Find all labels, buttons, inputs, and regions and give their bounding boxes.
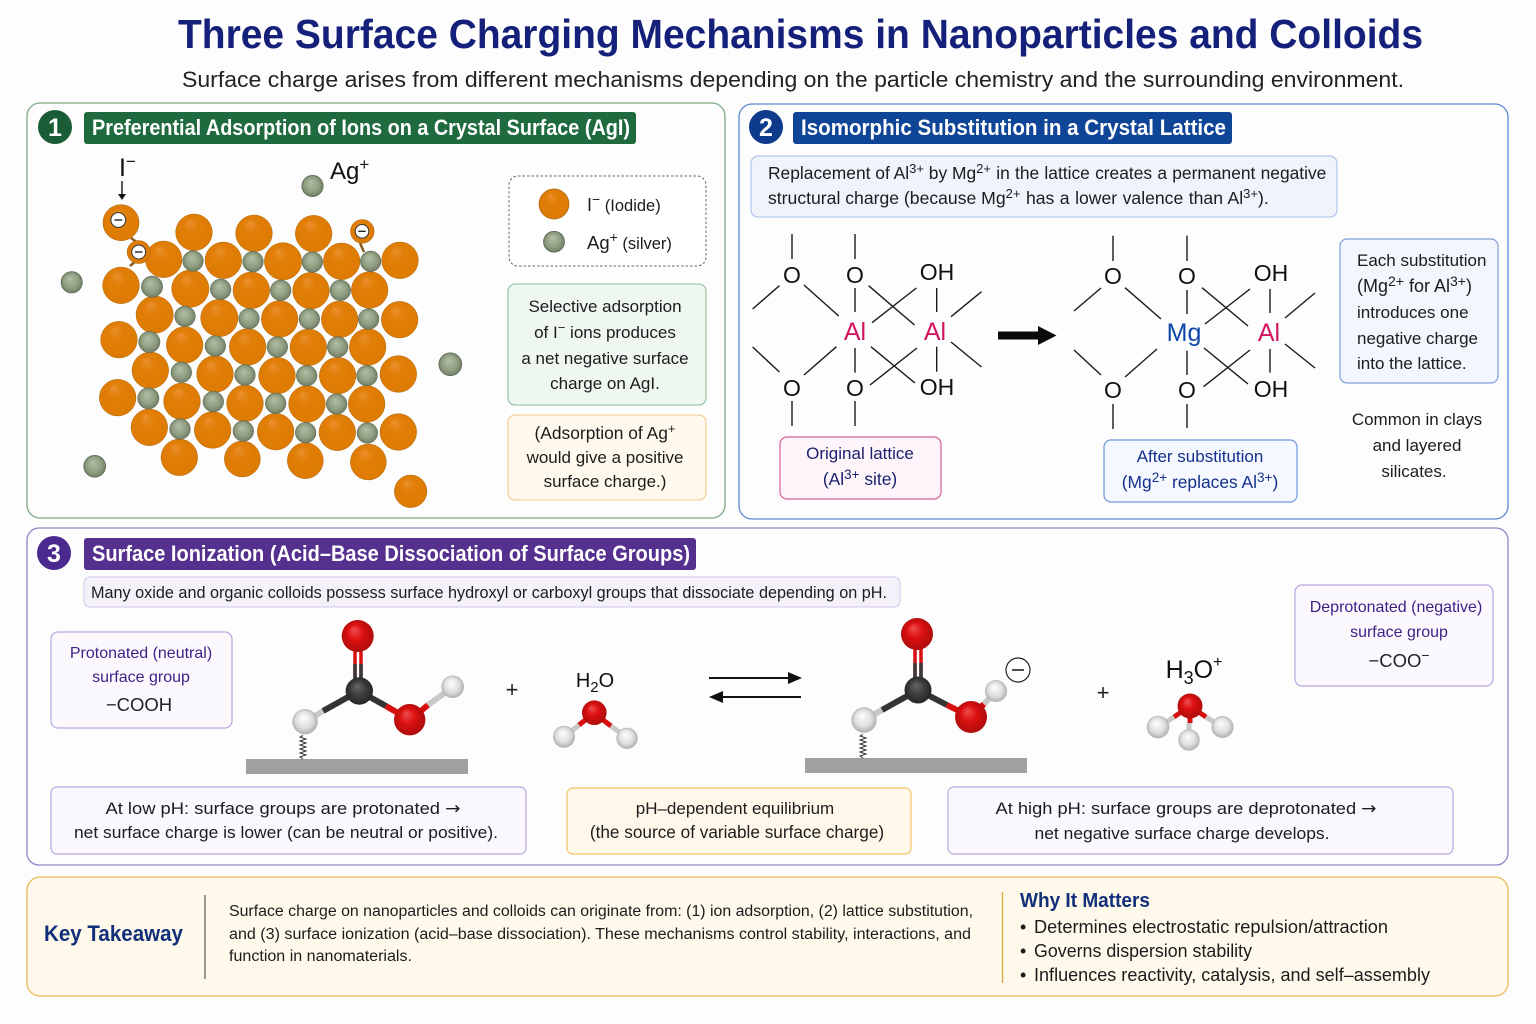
heading 1: Preferential Adsorption of Ions on a Crystal Surface (AgI) xyxy=(92,115,630,140)
callout: selective adsorption: − xyxy=(558,320,565,335)
callout: selective adsorption: of I xyxy=(534,323,558,342)
callout: replacement description: 3+ xyxy=(1243,186,1258,201)
original lattice structure: O xyxy=(783,262,801,288)
callout: replacement description: has a lower valence than Al xyxy=(1020,188,1243,208)
callout: replacement description: 2+ xyxy=(1006,186,1020,201)
free Ag+ ions xyxy=(61,175,462,477)
legend xyxy=(509,176,706,266)
note: clays: and layered xyxy=(1373,436,1461,455)
plus sign: + xyxy=(1097,680,1109,705)
subtitle: Surface charge arises from different mechanisms depending on the particle chemistry and the surrounding environment. xyxy=(182,67,1404,92)
substituted lattice structure: O xyxy=(1104,377,1122,403)
legend: iodide: − xyxy=(592,191,600,207)
callout: pH-dependent equilibrium: pH–dependent equilibrium xyxy=(636,799,834,818)
callout: selective adsorption: ions produces xyxy=(565,323,676,342)
label: deprotonated group: Deprotonated (negative) xyxy=(1310,599,1482,616)
number badge 2 xyxy=(749,110,783,144)
why it matters: Determines electrostatic repulsion/attraction xyxy=(1034,917,1388,937)
label: protonated group xyxy=(51,632,232,728)
water molecule: H xyxy=(576,670,590,692)
label: after substitution xyxy=(1104,440,1297,502)
substituted lattice structure xyxy=(1074,236,1315,429)
callout: low pH xyxy=(51,787,526,854)
legend: silver: + xyxy=(610,229,618,245)
panel 1: preferential adsorption xyxy=(27,103,725,518)
label: after substitution: After substitution xyxy=(1137,447,1263,466)
number badge 1: 1 xyxy=(48,114,62,142)
callout: replacement description xyxy=(751,156,1337,217)
negative charge symbol xyxy=(1006,658,1030,682)
callout: replacement description: by Mg xyxy=(924,163,976,183)
hydronium ion: 3 xyxy=(1184,668,1194,688)
why it matters: Governs dispersion stability xyxy=(1034,941,1252,961)
callout: high pH xyxy=(948,787,1453,854)
hydronium ion: O xyxy=(1194,656,1213,684)
original lattice structure xyxy=(753,234,982,426)
hydronium ion: H xyxy=(1166,656,1184,684)
panel 2: isomorphic substitution xyxy=(739,104,1508,519)
water molecule xyxy=(553,670,638,749)
callout: each substitution: (Mg xyxy=(1357,276,1388,296)
legend: iodide: I xyxy=(587,195,592,215)
callout: each substitution: 2+ xyxy=(1388,273,1404,289)
why it matters: • xyxy=(1020,965,1026,985)
original lattice structure: OH xyxy=(920,374,954,400)
AgI crystal lattice xyxy=(99,214,427,508)
number badge 3: 3 xyxy=(47,540,61,568)
original lattice structure: O xyxy=(846,262,864,288)
label: deprotonated group: −COO xyxy=(1368,650,1421,671)
callout: replacement description: 2+ xyxy=(976,161,991,176)
note: clays: silicates. xyxy=(1381,462,1447,481)
label: I- with arrow: − xyxy=(126,152,136,171)
label: I- with arrow xyxy=(118,152,136,200)
hydronium ion: + xyxy=(1213,654,1222,671)
takeaway heading: Key Takeaway xyxy=(44,921,184,946)
callout: Ag+ adsorption note: + xyxy=(668,421,676,436)
number badge 3 xyxy=(37,536,71,570)
protonated molecule on surface xyxy=(246,620,468,774)
callout: pH-dependent equilibrium xyxy=(567,788,911,854)
label: protonated group: −COOH xyxy=(106,694,172,715)
callout: replacement description: 3+ xyxy=(909,161,924,176)
callout: low pH: net surface charge is lower (can be neutral or positive). xyxy=(74,823,498,842)
why it matters: Influences reactivity, catalysis, and self–assembly xyxy=(1034,965,1430,985)
legend: silver xyxy=(544,229,672,253)
label: deprotonated group: − xyxy=(1421,647,1430,663)
number badge 1 xyxy=(38,110,72,144)
label: original lattice: (Al xyxy=(823,469,844,489)
takeaway text: Surface charge on nanoparticles and colloids can originate from: (1) ion adsorption, (2) lattice substitution, xyxy=(229,903,973,920)
panel 3 frame xyxy=(27,528,1508,865)
label: protonated group: Protonated (neutral) xyxy=(70,645,212,662)
callout: each substitution: into the lattice. xyxy=(1357,354,1467,373)
label: original lattice xyxy=(780,437,941,499)
legend: iodide: (Iodide) xyxy=(600,197,661,215)
takeaway frame xyxy=(27,877,1508,996)
number badge 2: 2 xyxy=(759,114,773,142)
callout: Ag+ adsorption note xyxy=(508,415,706,500)
arrow: substitution xyxy=(998,326,1056,345)
callout: selective adsorption: Selective adsorption xyxy=(528,297,682,316)
label: after substitution: 2+ xyxy=(1152,470,1167,485)
original lattice structure: Al xyxy=(924,318,946,346)
panel: key takeaway xyxy=(27,877,1508,996)
heading 2: Isomorphic Substitution in a Crystal Lattice xyxy=(801,115,1226,140)
panel 1 frame xyxy=(27,103,725,518)
label: original lattice: 3+ xyxy=(844,467,860,482)
original lattice structure: OH xyxy=(920,259,954,285)
label: Ag+: Ag xyxy=(330,158,359,185)
original lattice structure: Al xyxy=(844,318,866,346)
callout: each substitution: Each substitution xyxy=(1357,251,1486,270)
legend: silver: Ag xyxy=(587,232,610,253)
label: after substitution: ) xyxy=(1272,472,1278,492)
legend: iodide xyxy=(539,189,661,219)
panel 3: surface ionization xyxy=(27,528,1508,865)
why it matters: Why It Matters xyxy=(1020,890,1150,912)
callout: replacement description: in the lattice creates a permanent negative xyxy=(991,163,1326,183)
legend: silver: (silver) xyxy=(618,235,672,253)
callout: Ag+ adsorption note: would give a positive xyxy=(526,448,683,467)
substituted lattice structure: O xyxy=(1104,263,1122,289)
original lattice structure: O xyxy=(783,375,801,401)
callout: replacement description: Replacement of Al xyxy=(768,163,909,183)
note: clays xyxy=(1352,410,1482,481)
label: after substitution: 3+ xyxy=(1257,470,1273,485)
substituted lattice structure: O xyxy=(1178,377,1196,403)
water molecule: 2 xyxy=(590,679,599,696)
why it matters: • xyxy=(1020,917,1026,937)
callout: replacement description: ). xyxy=(1258,188,1269,208)
adsorbed iodide ions with negative charges xyxy=(103,205,374,266)
equilibrium arrows xyxy=(709,672,802,703)
note: clays: Common in clays xyxy=(1352,410,1482,429)
callout: replacement description: structural charge (because Mg xyxy=(768,188,1006,208)
label: Ag+: + xyxy=(359,155,369,174)
callout: low pH: At low pH: surface groups are protonated → xyxy=(106,799,460,819)
plus sign: + xyxy=(506,677,518,702)
title: Three Surface Charging Mechanisms in Nanoparticles and Colloids xyxy=(178,11,1423,57)
callout: each substitution: introduces one xyxy=(1357,303,1469,322)
callout: each substitution: 3+ xyxy=(1450,273,1466,289)
original lattice structure: O xyxy=(846,375,864,401)
substituted lattice structure: OH xyxy=(1254,260,1288,286)
water molecule: O xyxy=(599,670,614,692)
description strip xyxy=(84,577,900,607)
callout: each substitution: negative charge xyxy=(1357,329,1478,348)
label: I- with arrow: I xyxy=(119,154,126,182)
label: original lattice: Original lattice xyxy=(806,444,914,463)
description strip: Many oxide and organic colloids possess surface hydroxyl or carboxyl groups that dissociate depending on pH. xyxy=(91,583,887,602)
label: after substitution: replaces Al xyxy=(1167,472,1257,492)
panel 2 frame xyxy=(739,104,1508,519)
callout: selective adsorption: a net negative surface xyxy=(521,349,689,368)
deprotonated molecule on surface xyxy=(805,618,1030,773)
heading 3: Surface Ionization (Acid–Base Dissociation of Surface Groups) xyxy=(92,541,690,566)
callout: each substitution: for Al xyxy=(1404,276,1450,296)
label: after substitution: (Mg xyxy=(1122,472,1152,492)
callout: Ag+ adsorption note: (Adsorption of Ag xyxy=(534,423,668,443)
why it matters: • xyxy=(1020,941,1026,961)
substituted lattice structure: OH xyxy=(1254,376,1288,402)
callout: high pH: At high pH: surface groups are deprotonated → xyxy=(996,799,1376,819)
callout: pH-dependent equilibrium: (the source of variable surface charge) xyxy=(590,822,884,842)
takeaway text xyxy=(229,903,973,965)
callout: selective adsorption: charge on AgI. xyxy=(550,374,660,393)
label: deprotonated group xyxy=(1295,585,1493,686)
callout: high pH: net negative surface charge develops. xyxy=(1034,824,1330,843)
substituted lattice structure: O xyxy=(1178,263,1196,289)
hydronium ion xyxy=(1147,654,1234,751)
why it matters xyxy=(1020,890,1430,985)
callout: Ag+ adsorption note: surface charge.) xyxy=(544,472,666,491)
callout: each substitution xyxy=(1340,239,1498,383)
callout: selective adsorption xyxy=(508,284,706,405)
label: original lattice: site) xyxy=(859,469,897,489)
takeaway text: and (3) surface ionization (acid–base dissociation). These mechanisms control stability, interactions, and xyxy=(229,926,971,943)
callout: each substitution: ) xyxy=(1466,276,1472,296)
label: protonated group: surface group xyxy=(92,669,190,686)
label: deprotonated group: surface group xyxy=(1350,624,1448,641)
substituted lattice structure: Mg xyxy=(1167,319,1201,347)
takeaway text: function in nanomaterials. xyxy=(229,948,412,965)
substituted lattice structure: Al xyxy=(1258,319,1280,347)
